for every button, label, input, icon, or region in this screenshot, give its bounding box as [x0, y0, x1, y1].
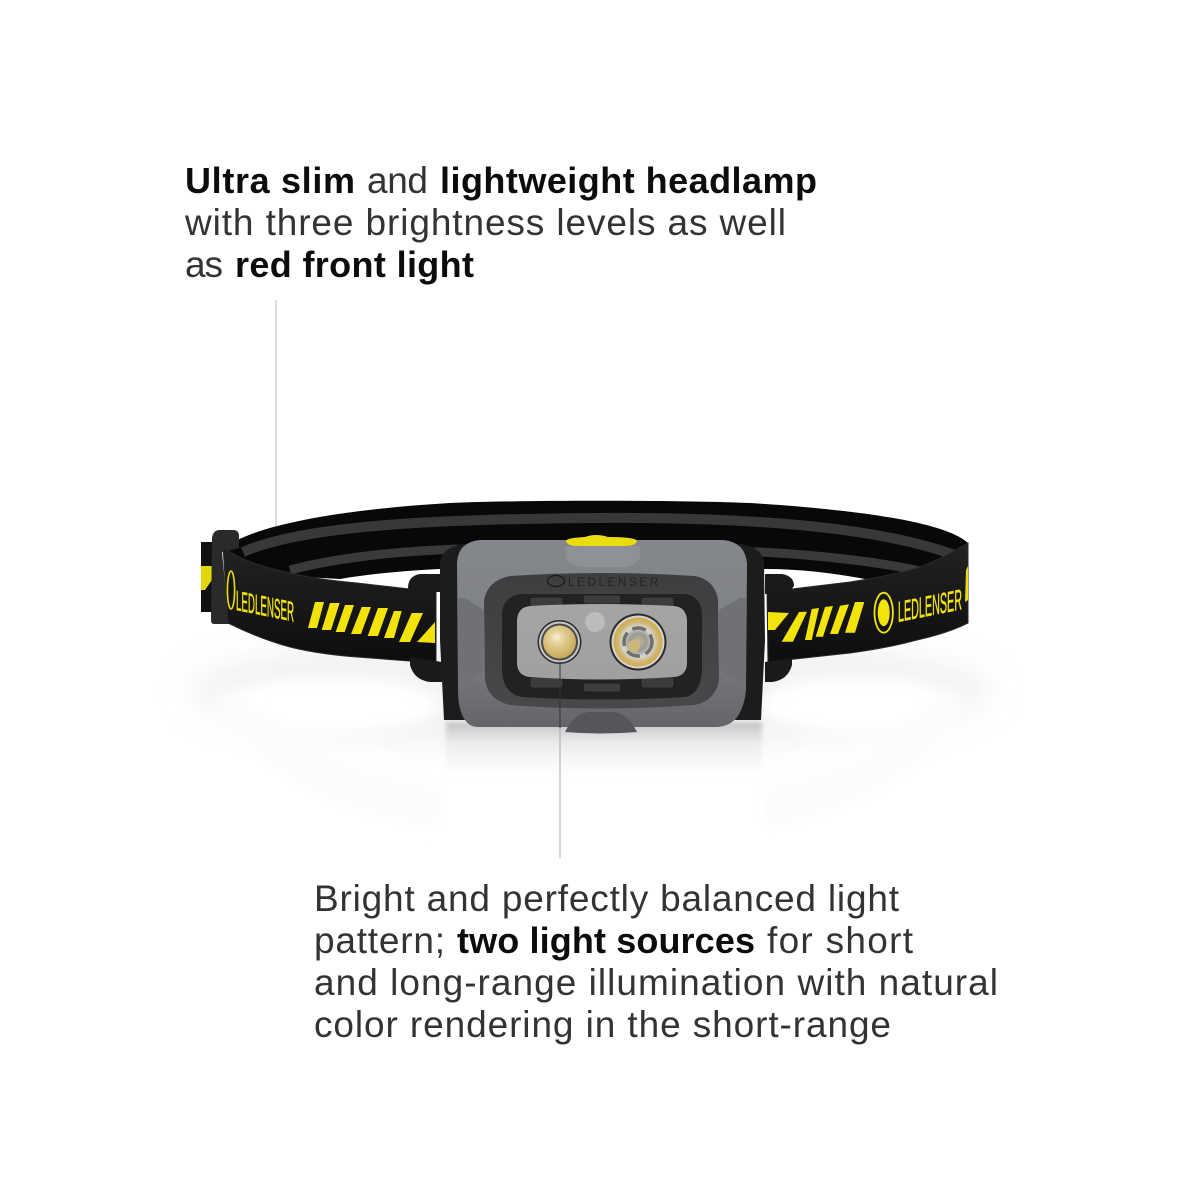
back strap	[222, 501, 968, 580]
lens: long range	[610, 614, 666, 670]
body chamfers	[458, 598, 746, 682]
text block: two light sources: two light sources	[457, 920, 755, 961]
lens: short range	[538, 620, 582, 664]
strap loops	[408, 574, 794, 682]
left strap	[223, 547, 436, 663]
grey body	[457, 540, 747, 727]
text block: two light sources: pattern;	[314, 920, 445, 961]
buttons	[530, 595, 674, 692]
dark bezel	[484, 573, 719, 708]
yellow button	[566, 535, 637, 546]
callout line: top	[275, 300, 277, 530]
heading: ultra slim headlamp: as	[185, 244, 223, 285]
lens window	[517, 604, 687, 680]
left strap logo	[227, 571, 294, 628]
housing sides	[440, 544, 765, 720]
floor reflection	[190, 630, 990, 825]
right strap stripes	[768, 602, 864, 642]
strap tail and buckle	[201, 530, 239, 624]
text block: two light sources	[314, 878, 998, 1045]
inner recess	[502, 594, 702, 700]
callout line: bottom	[559, 662, 561, 858]
heading: ultra slim headlamp: and	[367, 160, 428, 201]
left strap stripes	[308, 602, 435, 643]
sensor	[585, 612, 605, 632]
text block: two light sources: color rendering in the short-range	[314, 1004, 891, 1045]
heading: ultra slim headlamp	[184, 160, 817, 285]
top notch	[565, 546, 640, 567]
heading: ultra slim headlamp: red front light	[235, 244, 474, 285]
text: LEDLENSER	[898, 583, 962, 629]
headlamp	[201, 501, 968, 734]
heading: ultra slim headlamp: lightweight headlamp	[440, 160, 817, 201]
text block: two light sources: for short	[767, 920, 914, 961]
bottom notch	[565, 712, 637, 734]
heading: ultra slim headlamp: with three brightness levels as well	[184, 202, 786, 243]
heading: ultra slim headlamp: Ultra slim	[185, 160, 355, 201]
right strap logo	[874, 566, 968, 633]
text block: two light sources: Bright and perfectly balanced light	[314, 878, 900, 919]
text block: two light sources: and long-range illumination with natural	[314, 962, 998, 1003]
right strap	[767, 543, 968, 662]
headlamp: LEDLENSER	[236, 584, 294, 628]
body logo: LEDLENSER	[568, 577, 658, 589]
